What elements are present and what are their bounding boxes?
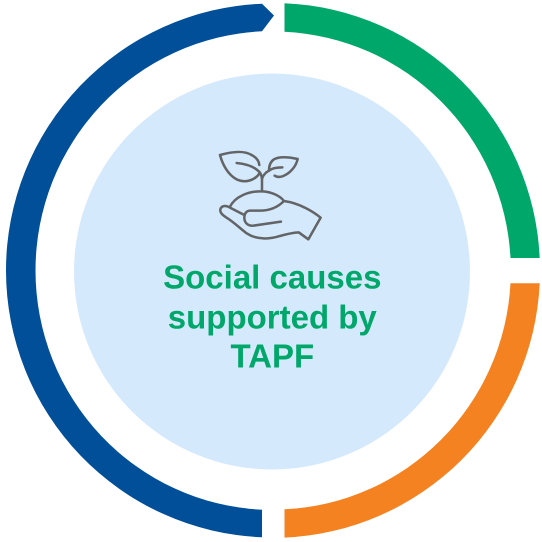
heading line 3: TAPF (230, 338, 314, 375)
icon: hand (220, 201, 321, 239)
inner circle background (74, 74, 470, 470)
icon: hand holding plant (220, 152, 321, 239)
icon: stem (260, 171, 269, 190)
heading: Social causes supported by TAPF (163, 258, 381, 375)
ring segment: green (284, 3, 540, 258)
ring segment: orange (284, 283, 540, 538)
heading line 1: Social causes (163, 258, 381, 296)
icon: soil mound (230, 191, 284, 207)
heading line 2: supported by (168, 298, 377, 335)
icon: left leaf (220, 152, 260, 181)
icon: right leaf (269, 157, 298, 177)
ring segment: blue with arrow tip (6, 4, 274, 537)
